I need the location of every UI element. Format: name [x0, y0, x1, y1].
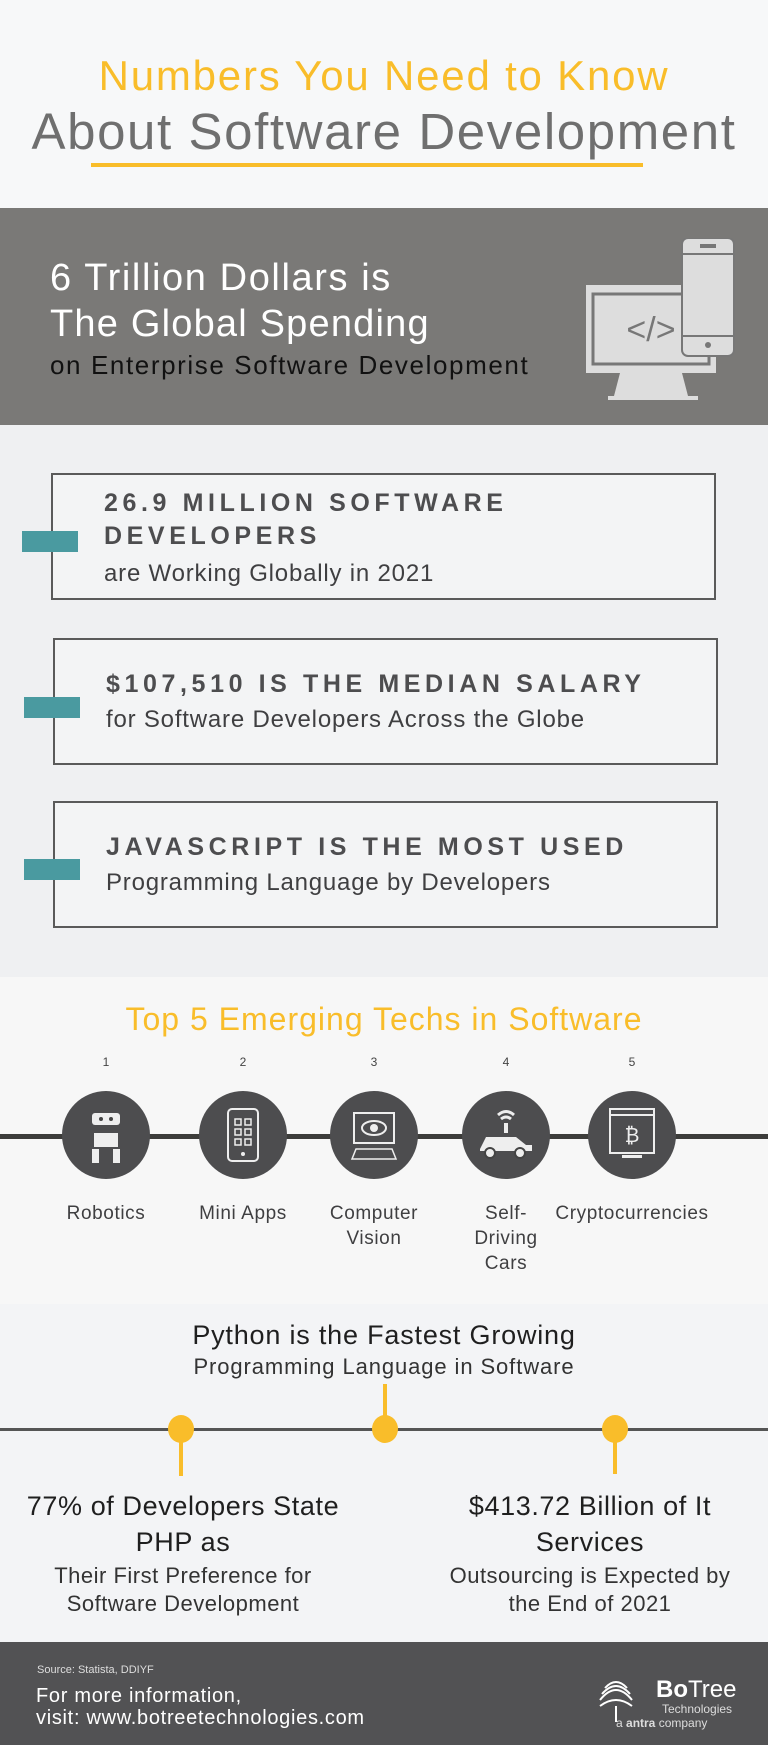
text: php: PHP as — [136, 1527, 230, 1557]
source: Source: Statista, DDIYF — [37, 1664, 154, 1676]
title underline — [91, 163, 643, 167]
title: About Software Development — [32, 103, 736, 160]
tab 2 — [24, 697, 80, 718]
banner text: on Enterprise Software Development — [50, 350, 529, 380]
item 2 mini apps: Mini Apps — [199, 1203, 287, 1224]
item 1 robotics — [62, 1055, 150, 1224]
banner: global spending — [0, 208, 768, 425]
icon: monitor and phone: </> — [626, 311, 676, 349]
text: php: Their First Preference for — [54, 1563, 312, 1588]
tab 3 — [24, 859, 80, 880]
stat box 1 — [51, 473, 716, 600]
item 4 self-driving cars: Driving — [474, 1228, 538, 1249]
timeline line — [0, 1134, 768, 1139]
text: outsourcing — [450, 1491, 730, 1616]
python section — [0, 1304, 768, 1642]
stat box 3: JAVASCRIPT IS THE MOST USED — [106, 833, 628, 861]
item 3 computer vision: Vision — [346, 1228, 402, 1249]
more info: For more information, — [36, 1685, 242, 1707]
stat box 1: are Working Globally in 2021 — [104, 560, 434, 587]
text: php: Software Development — [67, 1591, 299, 1616]
icon: monitor and phone — [586, 239, 733, 400]
item 5 cryptocurrencies — [555, 1055, 709, 1224]
item 5 cryptocurrencies: ₿ — [625, 1125, 639, 1147]
stats section background — [0, 425, 768, 977]
banner text — [50, 257, 529, 380]
text: outsourcing: Services — [536, 1527, 644, 1557]
text: outsourcing: the End of 2021 — [509, 1591, 671, 1616]
banner text: 6 Trillion Dollars is — [50, 257, 392, 299]
stat box 1: 26.9 MILLION SOFTWARE — [104, 489, 508, 517]
item 5 cryptocurrencies: 5 — [629, 1055, 635, 1069]
item 3 computer vision: Computer — [330, 1203, 418, 1224]
more info — [36, 1685, 365, 1729]
logo — [599, 1676, 736, 1730]
title: Numbers You Need to Know — [99, 52, 669, 99]
text: php: 77% of Developers State — [27, 1491, 339, 1521]
title — [32, 52, 736, 160]
python heading: Python is the Fastest Growing — [192, 1320, 576, 1350]
stat box 2 — [53, 638, 718, 765]
header background — [0, 0, 768, 208]
logo: BoTree — [656, 1676, 736, 1703]
item 4 self-driving cars: 4 — [503, 1055, 509, 1069]
python heading — [192, 1320, 576, 1379]
item 1 robotics: Robotics — [67, 1203, 145, 1224]
logo: a antra company — [616, 1716, 707, 1730]
item 3 computer vision: 3 — [371, 1055, 377, 1069]
stat box 2: for Software Developers Across the Globe — [106, 706, 585, 733]
top 5 section — [0, 977, 768, 1304]
banner text: The Global Spending — [50, 303, 430, 345]
logo: Technologies — [662, 1702, 732, 1716]
more info: visit: www.botreetechnologies.com — [36, 1707, 365, 1729]
stat box 2: $107,510 IS THE MEDIAN SALARY — [106, 670, 646, 698]
text: outsourcing: $413.72 Billion of It — [469, 1491, 711, 1521]
item 2 mini apps — [199, 1055, 287, 1224]
timeline — [0, 1428, 768, 1431]
item 5 cryptocurrencies: Cryptocurrencies — [555, 1203, 709, 1224]
item 1 robotics: 1 — [103, 1055, 109, 1069]
yellow markers — [168, 1384, 628, 1476]
python heading: Programming Language in Software — [193, 1354, 574, 1379]
stat box 3 — [53, 801, 718, 928]
top5 heading: Top 5 Emerging Techs in Software — [126, 1001, 642, 1037]
item 2 mini apps: 2 — [240, 1055, 246, 1069]
footer — [0, 1642, 768, 1745]
item 4 self-driving cars — [462, 1055, 550, 1274]
stat box 3: Programming Language by Developers — [106, 869, 551, 896]
top 5 section: Cars — [485, 1253, 527, 1274]
tab 1 — [22, 531, 78, 552]
text: outsourcing: Outsourcing is Expected by — [450, 1563, 730, 1588]
text: php — [27, 1491, 339, 1616]
item 3 computer vision — [330, 1055, 418, 1249]
item 4 self-driving cars: Self- — [485, 1203, 527, 1224]
stat box 1: DEVELOPERS — [104, 522, 321, 550]
